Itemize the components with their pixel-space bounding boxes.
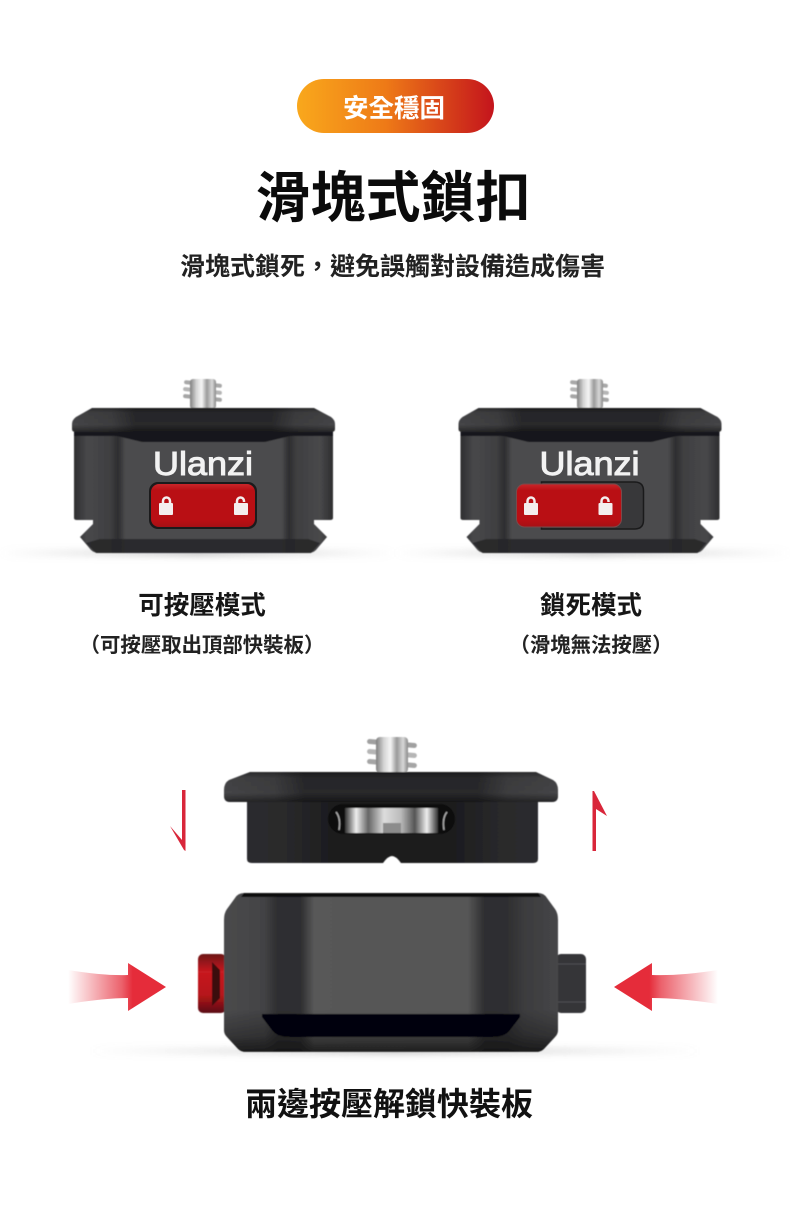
lower slot <box>262 1014 520 1037</box>
ground shadow <box>0 549 395 557</box>
flange shading <box>224 772 558 802</box>
device: press mode <box>0 379 395 557</box>
slider track <box>542 482 644 529</box>
channel shadow <box>460 432 720 442</box>
screw <box>570 379 609 409</box>
ground shadow <box>395 549 790 557</box>
icon: open lock <box>234 498 248 515</box>
plate shading <box>72 408 335 432</box>
roller slot <box>328 804 455 834</box>
base bevel <box>472 539 706 553</box>
bottom shading <box>224 1010 558 1052</box>
icon: closed lock <box>159 498 173 515</box>
label: press mode <box>80 592 324 657</box>
device: locked mode <box>395 379 790 557</box>
logo: Ulanzi <box>153 445 253 482</box>
badge: 安全穩固: 安全穩固 <box>343 95 445 123</box>
quick-release plate <box>224 737 558 863</box>
screw <box>183 379 222 409</box>
label: press mode: 可按壓模式 <box>138 592 266 620</box>
main body <box>224 893 558 1052</box>
badge: 安全穩固 <box>297 79 494 133</box>
icon: open lock <box>598 498 612 515</box>
label: press mode: （可按壓取出頂部快裝板） <box>80 634 324 657</box>
label: locked mode: （滑塊無法按壓） <box>509 633 673 657</box>
subtitle: 滑塊式鎖死，避免誤觸對設備造成傷害 <box>180 252 605 281</box>
top rim <box>241 893 541 897</box>
plate flange <box>224 772 558 802</box>
lower body <box>74 431 333 553</box>
plate body <box>247 800 538 863</box>
top plate <box>72 408 335 432</box>
arrow: plate down <box>170 790 186 851</box>
title: 滑塊式鎖扣 <box>255 167 531 229</box>
red slider button <box>149 482 257 529</box>
label: locked mode: 鎖死模式 <box>540 592 642 620</box>
left red button <box>198 954 226 1013</box>
icon: closed lock <box>524 498 538 515</box>
logo: Ulanzi <box>540 445 640 482</box>
base bevel <box>86 539 320 553</box>
screw <box>367 737 417 773</box>
label: locked mode <box>509 592 673 657</box>
channel shadow <box>74 432 333 442</box>
lower body <box>460 431 720 553</box>
right black button <box>556 954 586 1013</box>
caption: 兩邊按壓解鎖快裝板 <box>245 1086 533 1122</box>
arrow: plate up <box>592 791 607 851</box>
ground shadow <box>90 1047 700 1055</box>
plate shading <box>458 408 722 432</box>
arrow: press right button <box>614 963 718 1011</box>
top plate <box>458 408 722 432</box>
arrow: press left button <box>68 963 166 1011</box>
base unit with side buttons <box>90 893 700 1055</box>
red slider button <box>516 484 622 527</box>
